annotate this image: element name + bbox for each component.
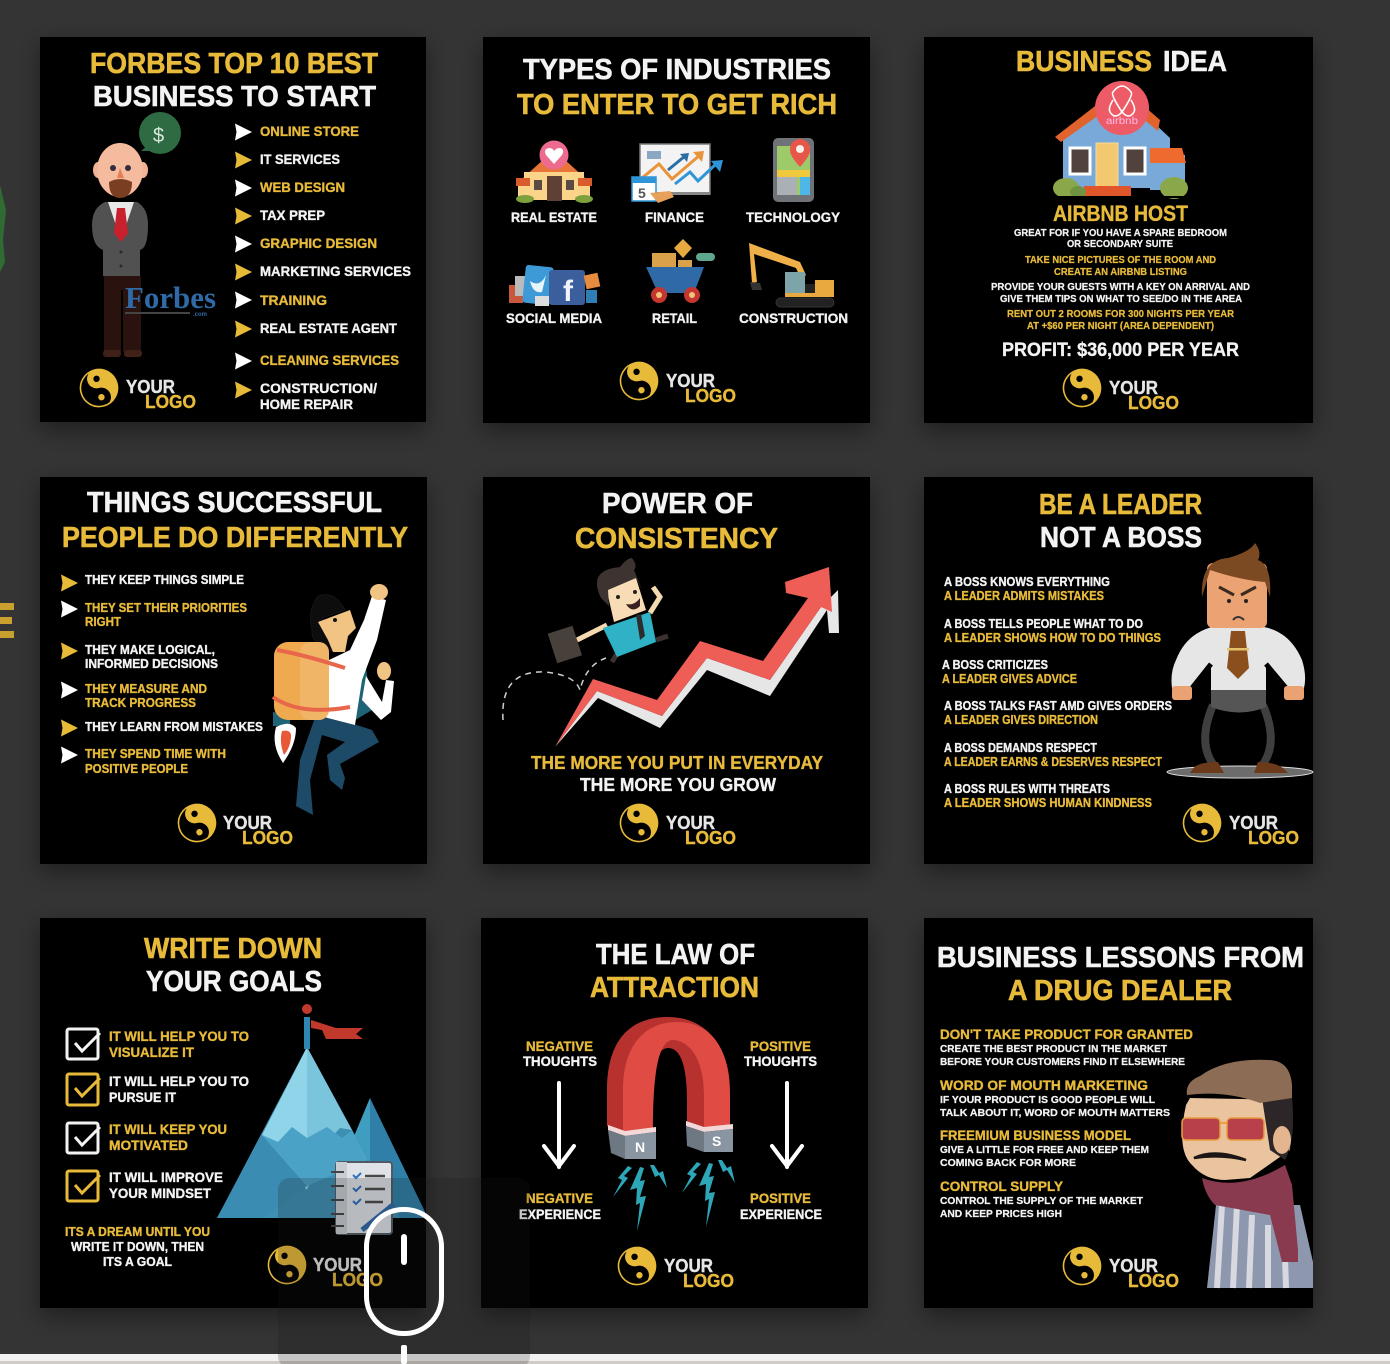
checklist: PURSUE IT: [109, 1089, 176, 1105]
list: habits: THEY LEARN FROM MISTAKES: [85, 720, 263, 734]
logo: YOUR: [1229, 812, 1278, 833]
text block: steps: CREATE AN AIRBNB LISTING: [1054, 266, 1187, 278]
list: boss versus leader: A BOSS TELLS PEOPLE WHAT TO DO: [944, 617, 1143, 631]
logo: LOGO: [332, 1269, 383, 1290]
title: A DRUG DEALER: [1008, 975, 1232, 1007]
checklist: YOUR MINDSET: [109, 1185, 211, 1201]
quote: [65, 1225, 210, 1269]
right column: positive: [740, 1038, 822, 1222]
checklist: VISUALIZE IT: [109, 1044, 194, 1060]
title: BE A LEADER: [1039, 489, 1202, 521]
illustration: horseshoe magnet with sparks: S: [712, 1133, 721, 1149]
panel: power of consistency: [483, 477, 870, 864]
panel: write down your goals: [40, 918, 428, 1308]
logo: [76, 365, 196, 412]
title: THINGS SUCCESSFUL: [87, 487, 382, 519]
text block: steps: RENT OUT 2 ROOMS FOR 300 NIGHTS PER YEAR: [1007, 308, 1234, 320]
label: social media: SOCIAL MEDIA: [506, 310, 602, 326]
list: boss versus leader: A BOSS CRITICIZES: [942, 658, 1048, 672]
title: ATTRACTION: [590, 972, 759, 1004]
list: ten businesses: TAX PREP: [260, 207, 325, 223]
icon: real estate house with heart: [516, 140, 593, 203]
panel: business idea airbnb host: [924, 37, 1313, 423]
label: construction: CONSTRUCTION: [739, 310, 848, 326]
logo: [1059, 365, 1179, 413]
logo: LOGO: [1128, 392, 1179, 413]
title: BUSINESS: [1016, 46, 1152, 78]
title: PEOPLE DO DIFFERENTLY: [62, 522, 408, 554]
title: [1039, 489, 1202, 554]
list: boss versus leader: A LEADER EARNS & DESERVES RESPECT: [944, 755, 1162, 769]
lessons list: BEFORE YOUR CUSTOMERS FIND IT ELSEWHERE: [940, 1056, 1185, 1068]
Forbes logo: .com: [193, 312, 207, 318]
panel: be a leader not a boss: [924, 477, 1313, 864]
title: NOT A BOSS: [1040, 522, 1202, 554]
logo: YOUR: [666, 812, 715, 833]
lessons list: AND KEEP PRICES HIGH: [940, 1208, 1062, 1220]
icon: technology phone with map pin: [773, 138, 814, 202]
logo: [616, 800, 736, 848]
lessons list: TALK ABOUT IT, WORD OF MOUTH MATTERS: [940, 1107, 1170, 1119]
title: FORBES TOP 10 BEST: [90, 48, 378, 80]
list: boss versus leader: A LEADER ADMITS MISTAKES: [944, 589, 1104, 603]
list: ten businesses: REAL ESTATE AGENT: [260, 320, 397, 336]
title: YOUR GOALS: [146, 966, 322, 998]
Forbes logo: Forbes: [125, 280, 216, 315]
quote: WRITE IT DOWN, THEN: [71, 1240, 204, 1254]
list: habits: THEY MEASURE AND: [85, 682, 207, 696]
text block: steps: [991, 227, 1250, 332]
logo: YOUR: [1109, 377, 1158, 398]
title: [575, 488, 778, 555]
label: finance: FINANCE: [645, 209, 704, 225]
title: TYPES OF INDUSTRIES: [523, 54, 831, 86]
lessons list: WORD OF MOUTH MARKETING: [940, 1077, 1148, 1093]
illustration: angry boss: [1167, 543, 1313, 778]
icon: construction excavator: [749, 243, 834, 307]
list: habits: THEY KEEP THINGS SIMPLE: [85, 573, 244, 587]
title: IDEA: [1163, 46, 1227, 78]
chart: rising arrow: [555, 567, 839, 747]
bottom white progress strip: [0, 1354, 1390, 1364]
logo: [264, 1242, 383, 1290]
list: ten businesses: HOME REPAIR: [260, 396, 353, 412]
icon: finance chart: [632, 144, 723, 203]
logo: YOUR: [666, 370, 715, 391]
logo: YOUR: [223, 812, 272, 833]
lessons list: CREATE THE BEST PRODUCT IN THE MARKET: [940, 1043, 1168, 1055]
list: ten businesses: CLEANING SERVICES: [260, 352, 399, 368]
panel: the law of attraction: [481, 918, 868, 1308]
text block: steps: AT +$60 PER NIGHT (AREA DEPENDENT): [1027, 320, 1214, 332]
title: CONSISTENCY: [575, 523, 778, 555]
illustration: man with cap, sunglasses and scarf: [1182, 1060, 1313, 1288]
left column: negative: EXPERIENCE: [519, 1206, 601, 1222]
list: ten businesses: CONSTRUCTION/: [260, 380, 377, 396]
cropped yellow letter at left edge: [0, 603, 14, 638]
list: boss versus leader: A BOSS KNOWS EVERYTHING: [944, 575, 1110, 589]
lessons list: GIVE A LITTLE FOR FREE AND KEEP THEM: [940, 1144, 1149, 1156]
text block: steps: TAKE NICE PICTURES OF THE ROOM AND: [1025, 254, 1216, 266]
title: [90, 48, 378, 113]
logo: YOUR: [1109, 1255, 1158, 1276]
logo: LOGO: [685, 385, 736, 406]
icon: social media cards: f: [563, 275, 574, 308]
panel: business lessons from a drug dealer: [924, 918, 1313, 1308]
logo: LOGO: [683, 1270, 734, 1291]
logo: YOUR: [664, 1255, 713, 1276]
logo: LOGO: [145, 391, 196, 412]
label: technology: TECHNOLOGY: [746, 209, 841, 225]
logo: LOGO: [1128, 1270, 1179, 1291]
title: TO ENTER TO GET RICH: [517, 89, 837, 121]
list: boss versus leader: A LEADER GIVES DIRECTION: [944, 713, 1098, 727]
caption: THE MORE YOU PUT IN EVERYDAY: [531, 753, 823, 773]
right column: positive: POSITIVE: [750, 1190, 811, 1206]
logo: [1179, 800, 1299, 848]
left column: negative: NEGATIVE: [526, 1190, 593, 1206]
logo: LOGO: [242, 827, 293, 848]
illustration: businessman with dollar speech bubble: [92, 112, 181, 357]
title: [517, 54, 837, 121]
title: [937, 942, 1304, 1007]
quote: ITS A GOAL: [103, 1255, 172, 1269]
text block: steps: GIVE THEM TIPS ON WHAT TO SEE/DO IN THE AREA: [1000, 293, 1242, 305]
list: habits: THEY SPEND TIME WITH: [85, 747, 226, 761]
list: ten businesses: MARKETING SERVICES: [260, 263, 411, 279]
translucent video control overlay: [278, 1178, 530, 1364]
left column: negative: THOUGHTS: [523, 1053, 597, 1069]
left column: negative: [519, 1038, 601, 1222]
illustration: mountains with flag and notebook: [217, 1004, 428, 1234]
logo: [616, 358, 736, 406]
list: ten businesses: TRAINING: [260, 292, 327, 308]
checklist: [67, 1028, 249, 1201]
list: habits: THEY MAKE LOGICAL,: [85, 643, 215, 657]
logo: YOUR: [126, 376, 175, 397]
lessons list: DON'T TAKE PRODUCT FOR GRANTED: [940, 1026, 1193, 1042]
checklist: IT WILL KEEP YOU: [109, 1121, 227, 1137]
illustration: horseshoe magnet with sparks: [607, 1017, 735, 1231]
checklist: IT WILL HELP YOU TO: [109, 1073, 249, 1089]
list: boss versus leader: A BOSS RULES WITH THREATS: [944, 782, 1110, 796]
illustration: house with airbnb badge: airbnb: [1106, 116, 1138, 127]
list: habits: [61, 573, 263, 776]
logo: [174, 800, 293, 848]
list: boss versus leader: A BOSS TALKS FAST AMD GIVES ORDERS: [944, 699, 1172, 713]
lessons list: IF YOUR PRODUCT IS GOOD PEOPLE WILL: [940, 1094, 1156, 1106]
list: habits: INFORMED DECISIONS: [85, 657, 218, 671]
profit figure: PROFIT: $36,000 PER YEAR: [1002, 340, 1239, 361]
lessons list: FREEMIUM BUSINESS MODEL: [940, 1127, 1131, 1143]
lessons list: CONTROL SUPPLY: [940, 1178, 1064, 1194]
illustration: jumping cartoon businessman: [503, 558, 668, 720]
lessons list: COMING BACK FOR MORE: [940, 1157, 1076, 1169]
right column: positive: POSITIVE: [750, 1038, 811, 1054]
icon: retail shopping cart: [646, 239, 715, 303]
list: boss versus leader: A LEADER SHOWS HOW TO DO THINGS: [944, 631, 1161, 645]
illustration: house with airbnb badge: [1053, 81, 1188, 199]
list: ten businesses: WEB DESIGN: [260, 179, 345, 195]
title: BUSINESS LESSONS FROM: [937, 942, 1304, 974]
list: ten businesses: [235, 123, 411, 412]
list: ten businesses: ONLINE STORE: [260, 123, 359, 139]
list: boss versus leader: A LEADER SHOWS HUMAN KINDNESS: [944, 796, 1152, 810]
title: [144, 933, 322, 998]
icon: finance chart: 5: [638, 185, 646, 201]
quote: ITS A DREAM UNTIL YOU: [65, 1225, 210, 1239]
title: THE LAW OF: [596, 939, 755, 971]
label: real estate: REAL ESTATE: [511, 209, 597, 225]
list: habits: THEY SET THEIR PRIORITIES: [85, 601, 247, 615]
caption: [531, 753, 823, 795]
text block: steps: OR SECONDARY SUITE: [1067, 238, 1173, 250]
right column: positive: EXPERIENCE: [740, 1206, 822, 1222]
decorative plant cropped at left edge: [0, 185, 6, 272]
lessons list: [940, 1026, 1193, 1220]
lessons list: CONTROL THE SUPPLY OF THE MARKET: [940, 1195, 1144, 1207]
title: [62, 487, 408, 554]
heading: airbnb host: AIRBNB HOST: [1053, 201, 1188, 226]
list: habits: POSITIVE PEOPLE: [85, 762, 188, 776]
list: boss versus leader: A LEADER GIVES ADVICE: [942, 672, 1077, 686]
left column: negative: NEGATIVE: [526, 1038, 593, 1054]
list: habits: RIGHT: [85, 615, 121, 629]
list: ten businesses: IT SERVICES: [260, 151, 340, 167]
right column: positive: THOUGHTS: [744, 1053, 817, 1069]
illustration: horseshoe magnet with sparks: N: [635, 1139, 645, 1155]
logo: LOGO: [1248, 827, 1299, 848]
label: retail: RETAIL: [652, 310, 697, 326]
caption: THE MORE YOU GROW: [580, 775, 776, 795]
title: BUSINESS TO START: [93, 81, 376, 113]
checklist: MOTIVATED: [109, 1137, 188, 1153]
icon: mouse scroll hint: [366, 1210, 442, 1364]
list: boss versus leader: [942, 575, 1172, 810]
list: boss versus leader: A BOSS DEMANDS RESPECT: [944, 741, 1097, 755]
logo: LOGO: [685, 827, 736, 848]
panel: types of industries: [483, 37, 870, 423]
checklist: IT WILL IMPROVE: [109, 1169, 223, 1185]
title: [590, 939, 759, 1004]
logo: [1059, 1243, 1179, 1291]
logo: [614, 1243, 734, 1291]
illustration: businessman with jetpack: [273, 584, 394, 815]
panel: Forbes top 10 best business to start: [40, 37, 426, 422]
icon: social media cards: [509, 265, 600, 308]
logo: YOUR: [313, 1254, 362, 1275]
title: WRITE DOWN: [144, 933, 322, 965]
checklist: IT WILL HELP YOU TO: [109, 1028, 249, 1044]
text block: steps: PROVIDE YOUR GUESTS WITH A KEY ON ARRIVAL AND: [991, 281, 1250, 293]
list: habits: TRACK PROGRESS: [85, 696, 196, 710]
list: ten businesses: GRAPHIC DESIGN: [260, 235, 377, 251]
illustration: businessman with dollar speech bubble: $: [153, 125, 164, 147]
panel: things successful people do differently: [40, 477, 427, 864]
title: POWER OF: [602, 488, 753, 520]
text block: steps: GREAT FOR IF YOU HAVE A SPARE BEDROOM: [1014, 227, 1227, 239]
